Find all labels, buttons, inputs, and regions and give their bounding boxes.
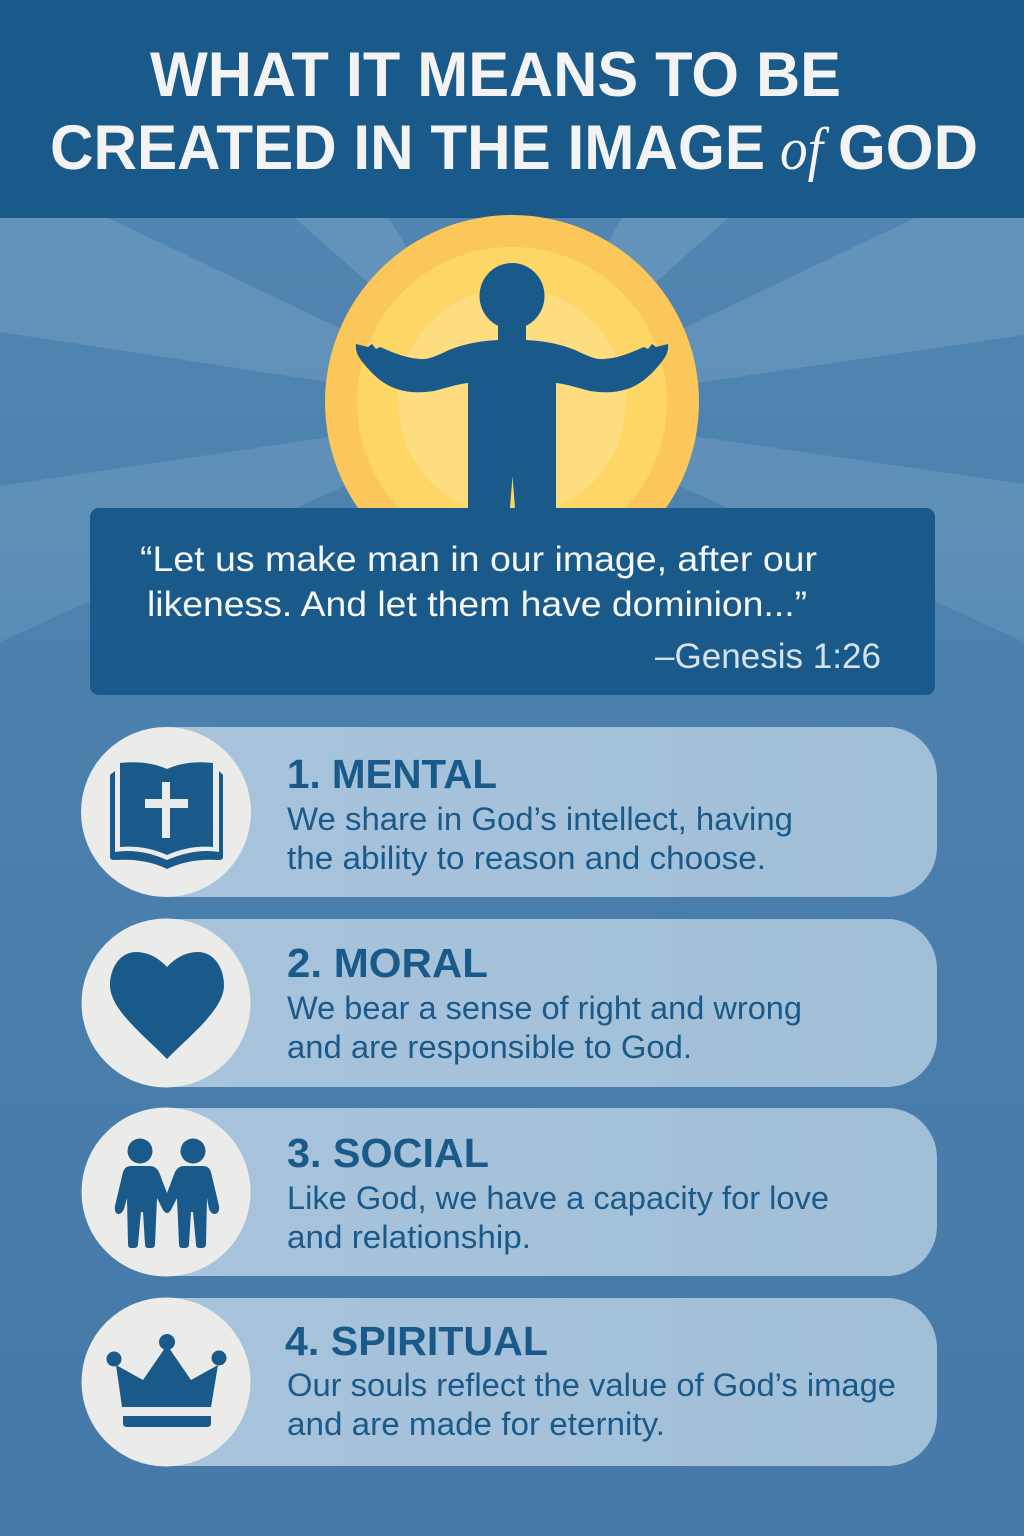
social heading: 3. SOCIAL [287,1130,489,1176]
panel: 1 mental [81,727,937,897]
mental heading: 1. MENTAL [287,751,497,797]
human silhouette with open arms [356,263,668,508]
moral description: We bear a sense of right and wrong [287,990,802,1026]
quote text: likeness. And let them have dominion...” [147,585,807,624]
quote text: “Let us make man in our image, after our [140,540,817,579]
quote citation: –Genesis 1:26 [655,637,881,676]
panel: scripture quote [90,508,935,695]
title: GOD [838,113,978,183]
icon: crown [82,1298,250,1466]
moral heading: 2. MORAL [287,940,488,986]
title: CREATED IN THE IMAGE [50,113,765,183]
title [50,40,978,183]
social description [287,1180,829,1255]
spiritual description: Our souls reflect the value of God’s image [287,1367,896,1403]
icon: open bible with cross [81,727,251,897]
sunburst rays [0,218,1024,642]
mental description: the ability to reason and choose. [287,840,766,876]
quote text [140,540,817,624]
social description: and relationship. [287,1219,531,1255]
header band [0,0,1024,218]
social description: Like God, we have a capacity for love [287,1180,829,1216]
spiritual description: and are made for eternity. [287,1406,665,1442]
icon: heart [82,918,250,1088]
spiritual heading: 4. SPIRITUAL [285,1318,548,1364]
panel: 3 social [82,1108,937,1276]
spiritual description [287,1367,896,1442]
sun [325,215,699,589]
panel: 4 spiritual [82,1298,937,1466]
title: of [780,116,830,182]
mental description [287,801,793,876]
mental description: We share in God’s intellect, having [287,801,793,837]
moral description [287,990,802,1065]
title: WHAT IT MEANS TO BE [150,40,841,110]
panel: 2 moral [82,918,937,1088]
moral description: and are responsible to God. [287,1029,692,1065]
icon: two people holding hands [82,1108,250,1276]
